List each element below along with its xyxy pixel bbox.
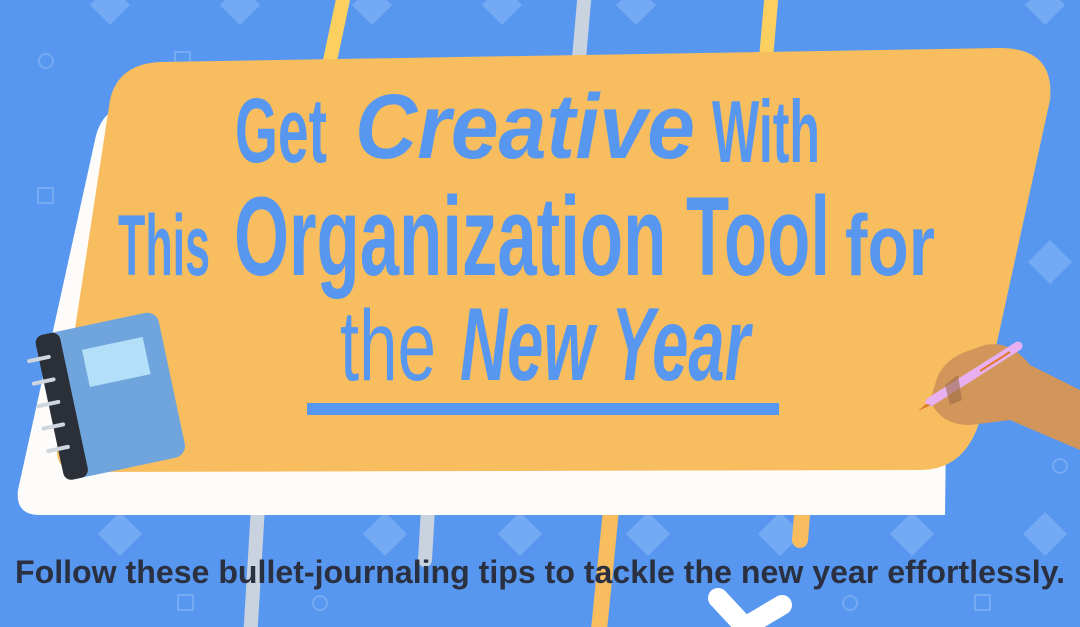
title: [118, 76, 935, 415]
icon: notebook: [24, 310, 187, 483]
title: Get: [235, 80, 327, 182]
title: New Year: [460, 287, 753, 403]
title: With: [712, 82, 820, 181]
orange panel: [57, 48, 1050, 472]
title: for: [845, 198, 935, 294]
icon: hand with pen: [918, 344, 1080, 450]
title: Creative: [355, 76, 695, 178]
icon: check mark: [718, 598, 782, 627]
title: This: [118, 198, 210, 294]
sticks: [250, 0, 808, 627]
white back panel: [18, 105, 950, 515]
title: the: [340, 290, 436, 402]
subtitle: Follow these bullet-journaling tips to tackle the new year effortlessly.: [15, 554, 1065, 590]
